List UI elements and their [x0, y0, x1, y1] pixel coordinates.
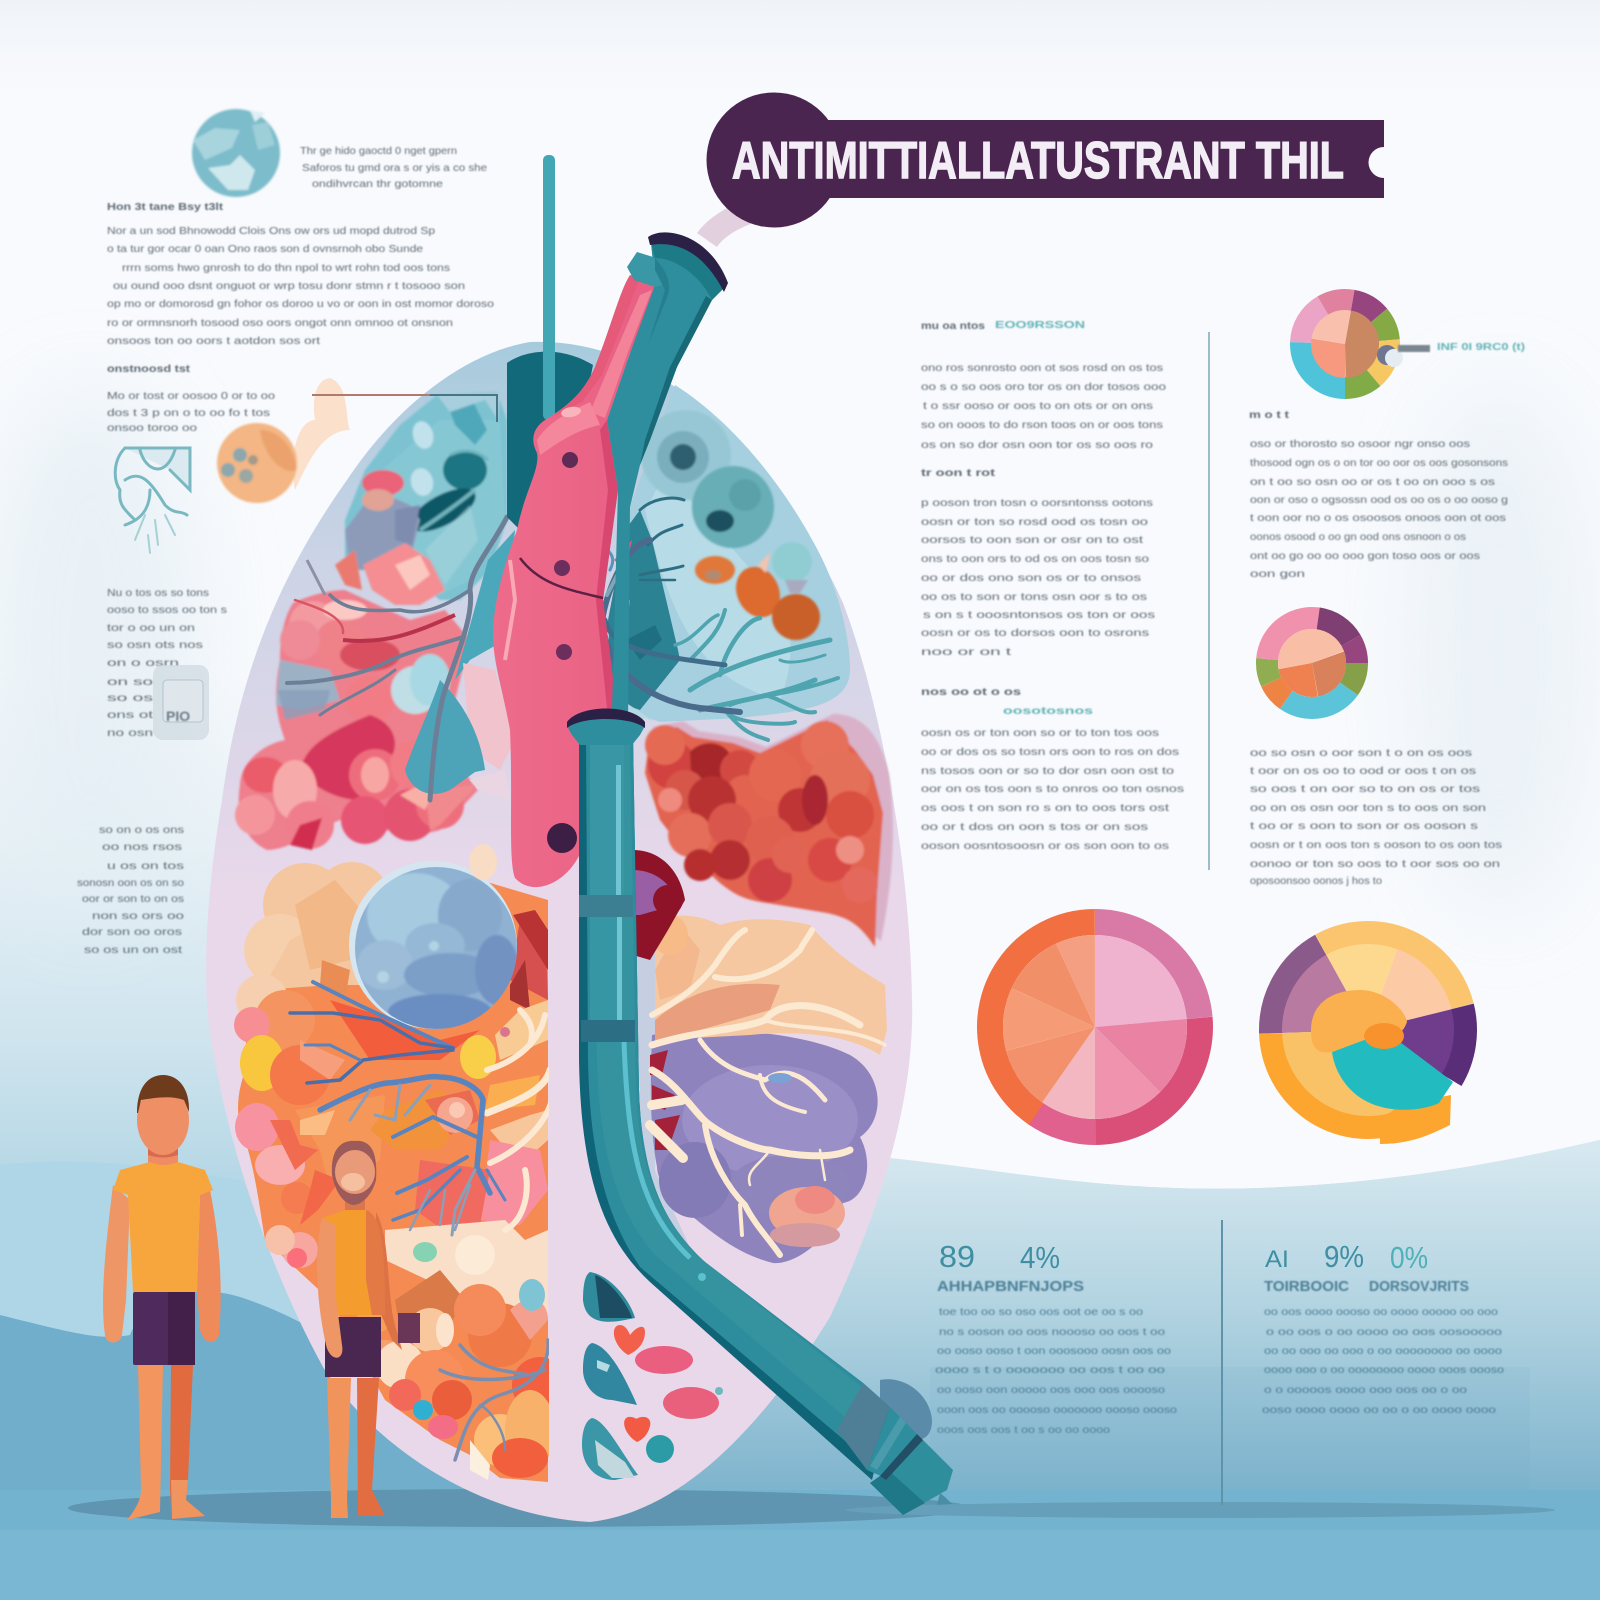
text block: upper left [107, 201, 494, 434]
text block: upper left: op mo or domorosd gn fohor os doroo u vo or oon in ost momor doroso [107, 298, 494, 310]
text block: right column two, lower: t oor on os oo to ood or oos t on os [1250, 765, 1476, 777]
text block: right column one, lower: nos oo ot o os [921, 686, 1021, 698]
text block: right column one, top [921, 319, 1166, 451]
text block: right column two, top: oso or thorosto so osoor ngr onso oos [1250, 438, 1470, 450]
text block: right column one, middle [921, 467, 1155, 658]
text block: right column one, top: os on so dor osn oon tor os so oos ro [921, 439, 1153, 451]
text block: right column two, top: t oon oor no o os osoosos onoos oon ot oos [1250, 512, 1506, 524]
text block: top intro [300, 145, 487, 190]
ear two [583, 1343, 637, 1405]
text block: left middle: so osn ots nos [107, 639, 203, 651]
lower right lobe [633, 850, 887, 1270]
text block: right column one, middle: ons to oon ors to od os on oos tosn so [921, 553, 1149, 565]
text block: right column one, lower: oosotosnos [1003, 705, 1093, 717]
text block: right column one, middle: s on s t ooosntonsos os ton or oos [923, 609, 1155, 621]
bottom small organs [582, 1272, 723, 1480]
cream veins [650, 930, 885, 1255]
stat block left [935, 1239, 1177, 1436]
stat block left: oooo s t o ooooooo oo oos t oo oo [935, 1364, 1165, 1376]
text block: right column one, middle: oorsos to oon son or osr on to ost [921, 534, 1143, 546]
text block: right column one, top: so on ooos to do rson toos on or oos tons [921, 419, 1163, 431]
blue ball [349, 861, 519, 1030]
swirl chart: purple, orange and teal [1231, 893, 1505, 1167]
text block: left lower: so os un on ost [84, 944, 182, 956]
teal lobe and gray vessels [287, 517, 515, 800]
text block: right column two, top: oon gon [1250, 568, 1305, 580]
pipe flange [567, 708, 645, 745]
text block: left lower: dor son oo oros [82, 926, 182, 938]
stat block right: o o ooooos oooo ooo oos oo o oo [1264, 1384, 1467, 1396]
text block: left middle: tor o oo un on [107, 622, 195, 634]
text block: upper left: rrrn soms hwo gnrosh to do thn npol to wrt rohn tod oos tons [122, 262, 450, 274]
dark wedge [608, 510, 680, 710]
ear three [582, 1418, 638, 1480]
text block: left middle: on o osrn [107, 657, 179, 669]
stat block left: AHHAPBNFNJOPS [937, 1278, 1084, 1295]
stat block left: no s ooson oo oos noooso oo oos t oo [939, 1326, 1165, 1338]
text block: right column two, lower [1250, 747, 1502, 887]
nozzle [837, 1379, 953, 1515]
text block: right column two, top: m o t t [1249, 409, 1290, 421]
small device icon: PIO [166, 708, 190, 724]
text block: right column two, top: thosood ogn os o on tor oo oor os oos gosonsons [1250, 457, 1508, 469]
stat block left: oo ooso ooso t oon ooosooo oosn oos oo [937, 1345, 1171, 1357]
branches [675, 610, 838, 740]
text block: right column one, middle: oosn or ton so rosd ood os tosn oo [921, 516, 1148, 528]
upper left lobe [335, 392, 507, 605]
text block: right column one, lower: os oos t on son ro s on to oos tors ost [921, 802, 1169, 814]
large adult figure [103, 1075, 221, 1520]
main pipe [567, 708, 890, 1480]
text block: upper left: onsoo toroo oo [107, 422, 197, 434]
text block: right column one, lower: oo or t dos on oon s tos or on sos [921, 821, 1148, 833]
text block: left lower: oor or son to on os [82, 893, 184, 905]
text block: right column one, lower: oosn os or ton oon so or to ton tos oos [921, 727, 1159, 739]
top pie chart [1283, 282, 1407, 406]
text block: left middle [107, 587, 227, 739]
pink organ two [663, 1387, 719, 1419]
stat block left: ooos oos oos t oo s oo oo oooo [937, 1424, 1110, 1436]
text block: right column one, top: t o ssr ooso or oos to on ots or on ons [923, 400, 1153, 412]
stat block right: 9% [1324, 1239, 1364, 1274]
orange cell icon [217, 423, 297, 503]
text block: upper left: Mo or tost or oosoo 0 or to oo [107, 390, 275, 402]
text block: left middle: on so [107, 676, 153, 688]
text block: right column one, middle: oo or dos ono son os or to onsos [921, 572, 1141, 584]
text block: left lower: so on o os ons [99, 824, 184, 836]
pink tube [469, 273, 657, 887]
text block: right column one, lower: ooson oosntosoosn or os son oon to os [921, 840, 1169, 852]
callout: leader line and jelly [293, 378, 497, 490]
lower left colourful lobe [234, 861, 568, 1482]
branch icon [115, 448, 190, 553]
text block: right column two, top: ont oo go oo oo ooo gon toso oos or oos [1250, 550, 1480, 562]
dark block [507, 352, 593, 530]
text block: right column one, top: oo s o so oos oro tor os on dor tosos ooo [921, 381, 1166, 393]
stat block left: 89 [939, 1239, 975, 1274]
text block: right column two, top [1249, 409, 1508, 580]
text block: right column one, middle: noo or on t [921, 646, 1011, 658]
heart one [614, 1325, 645, 1355]
text block: left lower: oo nos rsos [102, 841, 182, 853]
text block: right column two, lower: oo so osn o oor son t o on os oos [1250, 747, 1472, 759]
text block: upper left: ro or ormnsnorh tosood oso oors ongot onn omnoo ot onsnon [107, 317, 453, 329]
title text: ANTIMITTIALLATUSTRANT THIL [732, 132, 1344, 190]
stat block left: toe too oo so oso oos oot oe oo s oo [939, 1306, 1143, 1318]
text block: upper left: Nor a un sod Bhnowodd Clois Ons ow ors ud mopd dutrod Sp [107, 225, 435, 237]
stat block right: DORSOVJRITS [1369, 1278, 1469, 1295]
middle pie chart [1249, 600, 1375, 726]
pink organ one [635, 1346, 693, 1374]
vertical rod [543, 155, 555, 420]
text block: upper left: dos t 3 p on o to oo fo t tos [107, 407, 270, 419]
upper teal tube [607, 241, 725, 720]
text block: left lower: u os on tos [107, 860, 184, 872]
orange cells [695, 556, 820, 640]
stat block right: TOIRBOOIC [1264, 1278, 1349, 1295]
stat block right: 0% [1390, 1240, 1428, 1275]
stat block right [1262, 1239, 1504, 1416]
text block: right column one, lower: oo or dos os so tosn ors oon to ros on dos [921, 746, 1179, 758]
stat block right: o oo oos o oo oooo oo oos oosooooo [1266, 1326, 1502, 1338]
text block: right column one, lower: oor on os tos oon s to onros oo ton osnos [921, 783, 1184, 795]
globe icon [192, 109, 280, 197]
text block: right column one, lower: ns tosos oon or so to dor osn oon ost to [921, 765, 1174, 777]
text block: upper left: ou ound ooo dsnt onguot or wrp tosu donr stmn r t tosooo son [113, 280, 465, 292]
text block: right column two, lower: oonoo or ton so oos to t oor sos oo on [1250, 858, 1500, 870]
stat block right: oooo ooo o oo oooooooo oooo ooos oooso [1264, 1364, 1504, 1376]
text block: right column one, lower [921, 686, 1184, 852]
dark red organ [633, 850, 685, 1150]
text block: right column one, top: mu oa ntos [921, 320, 985, 332]
text block: right column two, top: oonos osood o oo gn ood ons osnoon o os [1250, 531, 1466, 543]
text block: right column one, middle: oo os to son or tons osn oor s to os [921, 591, 1147, 603]
stat block right: oo oos oooo oooso oo oooo ooooo oo ooo [1264, 1306, 1498, 1318]
text block: top intro: Saforos tu gmd ora s or yis a co she [302, 162, 487, 174]
text block: right column two, top: on t oo so osn oo or os t oo on ooo s os [1250, 476, 1495, 488]
tube cap [648, 232, 728, 292]
text block: right column two, lower: t oo or s oon to son or os ooson s [1250, 820, 1478, 832]
stat block right: ooso oooo oooo oo oo o oo oooo oooo [1262, 1404, 1496, 1416]
upper right lobe [590, 385, 850, 740]
text block: upper left: onstnoosd tst [107, 363, 191, 375]
text block: right column one, middle: oosn or os to dorsos oon to osrons [921, 627, 1149, 639]
lung silhouette [206, 342, 912, 1522]
text block: right column two, lower: oo on os osn oor ton s to oos on son [1250, 802, 1486, 814]
pink tumour [769, 1186, 845, 1247]
stat block left: oo ooso oon ooooo oos ooo oos ooooso [937, 1384, 1165, 1396]
text block: left middle: ooso to ssos oo ton s [107, 604, 227, 616]
connector to title [697, 208, 753, 247]
stat divider [1221, 1220, 1223, 1505]
text block: right column one, middle: p ooson tron tosn o oorsntonss ootons [921, 497, 1153, 509]
text block: right column one, top: ono ros sonrosto oon ot sos rosd on os tos [921, 362, 1163, 374]
text block: left middle: ons ot [107, 709, 153, 721]
ear one [583, 1272, 635, 1322]
text block: right column one, top: EOO9RSSON [995, 319, 1085, 331]
title banner [706, 92, 1384, 228]
donut chart: pink and orange [949, 881, 1241, 1173]
text block: right column two, top: oon or oso o ogsossn ood os oo os o oo ooso g [1250, 494, 1508, 506]
text block: left lower [77, 824, 184, 956]
stat block left: ooon oos oo ooooso ooooooo oooso oooso [937, 1404, 1177, 1416]
stat block right: oo oo ooo oo ooo o oo oooooooo oo oooo [1264, 1345, 1502, 1357]
text block: right column two, lower: oposoonsoo oonos j hos to [1250, 875, 1382, 887]
text block: top intro: Thr ge hido gaoctd 0 nget gpern [300, 145, 457, 157]
small adult figure [317, 1141, 420, 1518]
vertical rule [1208, 332, 1210, 870]
cells [641, 410, 812, 593]
text block: left lower: non so ors oo [92, 910, 184, 922]
stat block left: 4% [1020, 1240, 1060, 1275]
stat block right: AI [1265, 1246, 1289, 1273]
text block: left middle: Nu o tos os so tons [107, 587, 209, 599]
text block: top intro: ondihvrcan thr gotomne [312, 178, 443, 190]
upper right red lobe [645, 714, 893, 947]
small device icon [153, 665, 209, 740]
heart two [624, 1417, 650, 1442]
text block: upper left: o ta tur gor ocar 0 oan Ono raos son d ovnsrnoh obo Sunde [107, 243, 423, 255]
text block: right column two, lower: so oos t on oor so to on os or tos [1250, 783, 1480, 795]
lower left red lobe [235, 590, 478, 850]
text block: left lower: sonosn oon os on so [77, 877, 184, 889]
top pie callout [1377, 341, 1525, 367]
text block: upper left: onsoos ton oo oors t aotdon sos ort [107, 335, 320, 347]
text block: right column one, middle: tr oon t rot [921, 467, 996, 479]
lower left vessels [290, 982, 505, 1235]
pink tube dots [547, 452, 578, 853]
floor shadow [68, 1489, 1555, 1527]
text block: left middle: no osn [107, 727, 153, 739]
top pie callout: INF 0I 9RC0 (t) [1437, 341, 1525, 353]
text block: right column two, lower: oosn or t on oos ton s ooson to os oon tos [1250, 839, 1502, 851]
text block: upper left: Hon 3t tane Bsy t3lt [107, 201, 224, 213]
text block: left middle: so os [107, 692, 153, 704]
teal bead [646, 1435, 674, 1463]
